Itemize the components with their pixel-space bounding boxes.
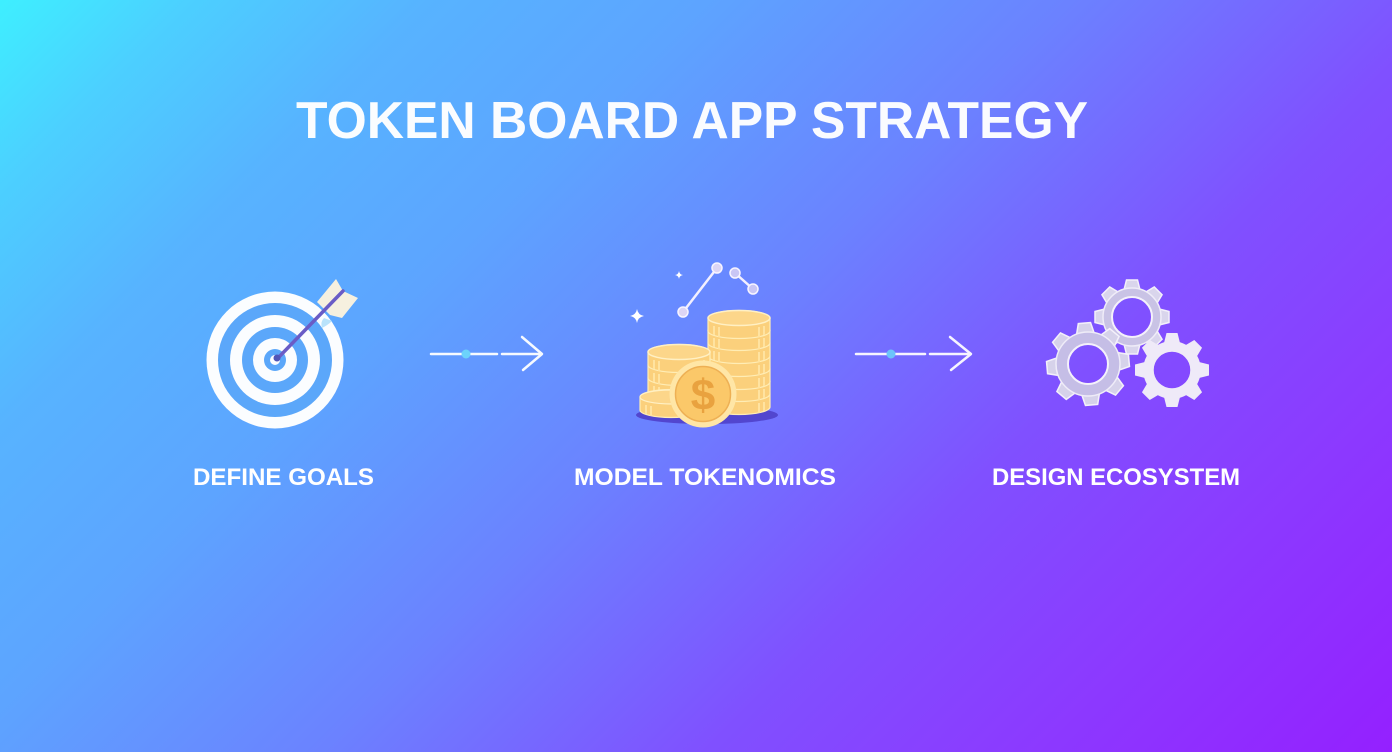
gear: right: [1135, 333, 1209, 407]
arrow: tokenomics to ecosystem: [856, 337, 971, 370]
title: TOKEN BOARD APP STRATEGY: [296, 92, 1088, 150]
gear: top: [1095, 280, 1169, 354]
label: model tokenomics: MODEL TOKENOMICS: [574, 464, 836, 491]
arrow: goals to tokenomics: [431, 337, 542, 370]
icon: coin stacks: $: [691, 371, 715, 420]
icon: target with arrow: [206, 279, 358, 428]
icon: coin stacks: [636, 310, 778, 428]
step 3: design ecosystem: [992, 280, 1240, 491]
icon: network nodes and sparkles: [630, 263, 758, 323]
step 1: define goals: [193, 279, 542, 491]
icon: three gears: [1044, 280, 1209, 408]
label: design ecosystem: DESIGN ECOSYSTEM: [992, 464, 1240, 491]
step 2: model tokenomics: [574, 263, 971, 491]
gear: left: [1044, 320, 1132, 408]
label: define goals: DEFINE GOALS: [193, 464, 374, 491]
